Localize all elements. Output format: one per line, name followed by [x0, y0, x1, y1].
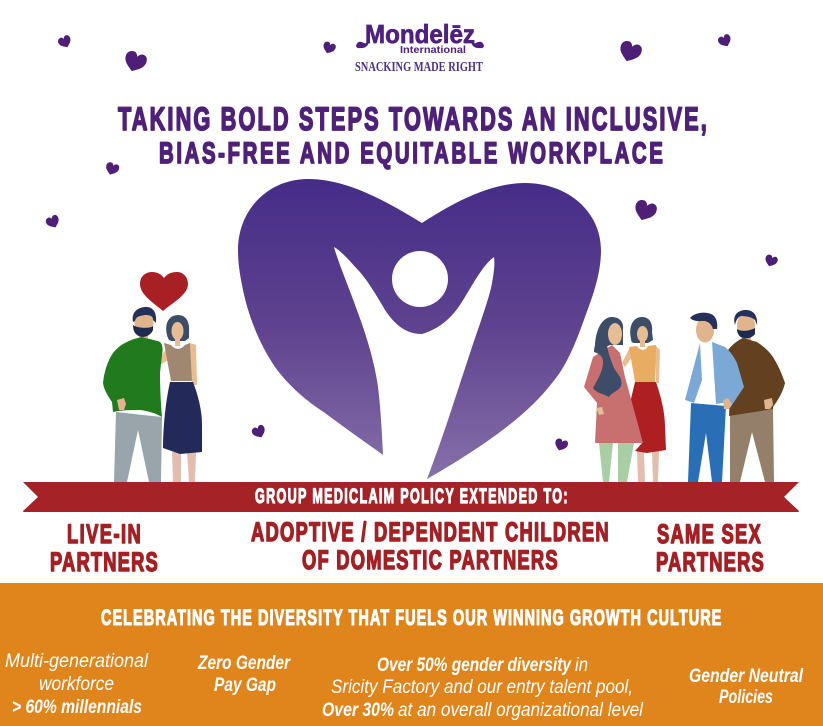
stat: gender neutral policies — [689, 666, 804, 708]
logo: Mondelez International: International — [400, 44, 466, 56]
left couple illustration — [103, 272, 202, 482]
stat: gender neutral policies: Policies — [719, 687, 773, 708]
band heading: CELEBRATING THE DIVERSITY THAT FUELS OUR WINNING GROWTH CULTURE — [101, 605, 721, 630]
logo: Mondelez International: SNACKING MADE RIGHT — [355, 60, 483, 75]
icon: red heart above couple — [140, 272, 188, 311]
heart figure head — [392, 251, 448, 307]
stat: zero gender pay gap: Pay Gap — [214, 675, 276, 696]
male couple illustration — [685, 310, 785, 482]
stat: millennials: > 60% millennials — [12, 697, 142, 718]
woman in red skirt — [622, 317, 666, 482]
stat: gender diversity: Over 50% gender diversity — [377, 655, 572, 676]
label: adoptive / dependent children: ADOPTIVE / DEPENDENT CHILDREN — [251, 516, 609, 547]
man in green sweater — [103, 307, 163, 482]
panel: orange diversity band — [0, 583, 823, 726]
title — [118, 101, 707, 170]
stat: gender diversity: Over 30% — [322, 700, 394, 721]
decorative small hearts — [45, 33, 779, 453]
stat: millennials: workforce — [39, 674, 114, 695]
stat: gender diversity — [322, 655, 644, 721]
women couple illustration — [584, 317, 666, 482]
label: same sex partners — [656, 518, 764, 577]
man in blue jacket — [685, 313, 744, 482]
label: live-in partners: PARTNERS — [50, 546, 158, 577]
ribbon banner — [23, 482, 799, 512]
stat: millennials — [5, 651, 149, 718]
stat: gender neutral policies: Gender Neutral — [689, 666, 804, 687]
title: TAKING BOLD STEPS TOWARDS AN INCLUSIVE, — [118, 101, 707, 137]
stat: gender diversity: Sricity Factory and our entry talent pool, — [331, 677, 633, 698]
label: live-in partners: LIVE-IN — [67, 518, 141, 549]
title: BIAS-FREE AND EQUITABLE WORKPLACE — [159, 137, 663, 170]
label: adoptive / dependent children — [251, 516, 609, 575]
label: live-in partners — [50, 518, 158, 577]
stat: gender diversity: at an overall organizational level — [398, 700, 644, 721]
big heart with person figure — [238, 179, 601, 479]
woman in pink dress — [584, 317, 643, 482]
stat: millennials: Multi-generational — [5, 651, 149, 672]
logo: Mondelez International — [355, 19, 484, 75]
woman in navy skirt — [158, 315, 202, 482]
stat: zero gender pay gap — [197, 653, 291, 696]
label: adoptive / dependent children: OF DOMESTIC PARTNERS — [302, 544, 558, 575]
stat: gender diversity: in — [575, 655, 588, 676]
label: same sex partners: PARTNERS — [656, 546, 764, 577]
logo: Mondelez International: Mondelēz — [365, 19, 475, 49]
label: same sex partners: SAME SEX — [657, 518, 761, 549]
stat: zero gender pay gap: Zero Gender — [197, 653, 291, 674]
ribbon text: GROUP MEDICLAIM POLICY EXTENDED TO: — [255, 484, 568, 508]
man in brown sweater — [728, 310, 785, 482]
